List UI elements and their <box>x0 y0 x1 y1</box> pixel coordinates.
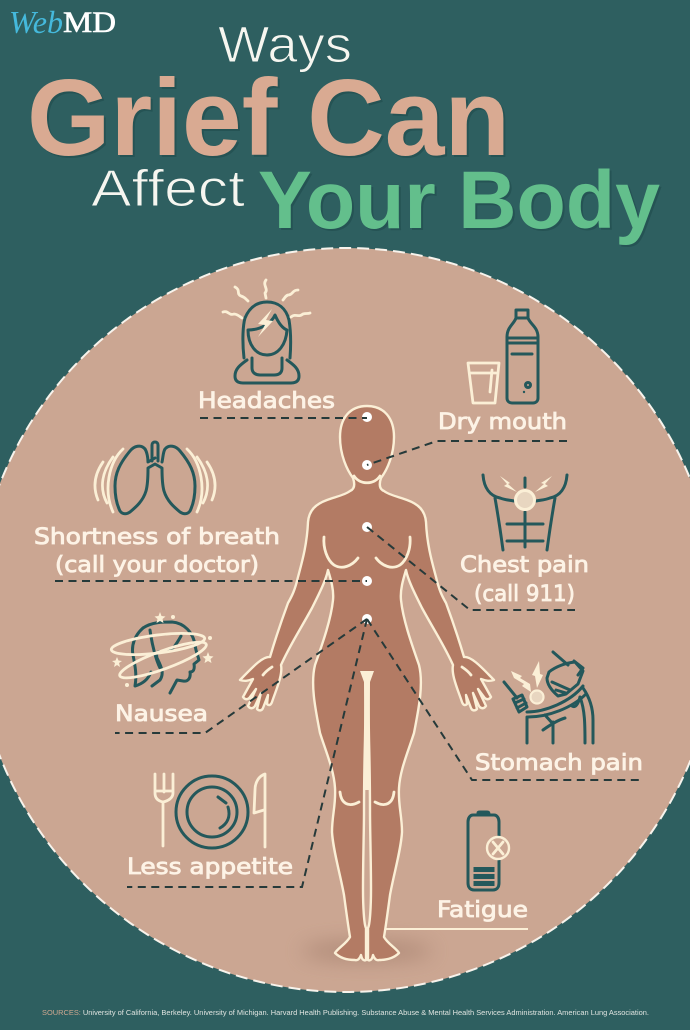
sources: SOURCES: University of California, Berkeley. University of Michigan. Harvard Health Publishing. Substance Abuse & Mental Health Services Administration. American Lung Association. <box>42 1008 649 1017</box>
icon: nausea <box>110 612 214 693</box>
logo: WebMD: Web <box>9 4 63 40</box>
icon: water bottle and glass <box>468 310 538 403</box>
label: Chest pain: (call 911) <box>474 581 575 607</box>
label: Fatigue: Fatigue <box>437 897 528 923</box>
label: Headaches: Headaches <box>198 388 335 414</box>
icon: plate and cutlery <box>155 774 265 848</box>
title: Grief Can <box>29 59 512 181</box>
title: Ways <box>218 16 352 73</box>
label: Chest pain <box>460 552 589 607</box>
logo: WebMD: MD <box>63 6 116 39</box>
label: Less appetite: Less appetite <box>127 854 293 880</box>
body marker dots <box>362 412 372 624</box>
label: Chest pain: Chest pain <box>460 552 589 578</box>
title: Affect <box>91 160 246 218</box>
title: Your Body <box>260 157 662 248</box>
icon: lungs <box>95 442 215 514</box>
title <box>27 16 662 248</box>
label: Shortness of breath: Shortness of breath <box>34 524 280 550</box>
label: Dry mouth: Dry mouth <box>438 409 567 435</box>
label: Nausea: Nausea <box>115 701 208 727</box>
icon: stomach pain <box>504 652 593 743</box>
title: Your Body <box>258 155 660 246</box>
panel: dashed circle <box>0 248 690 992</box>
title: Grief Can <box>27 57 510 179</box>
label: Stomach pain: Stomach pain <box>475 750 643 776</box>
icon: headache <box>223 280 310 383</box>
connector lines <box>55 418 643 929</box>
label: Shortness of breath <box>34 524 280 578</box>
icon: chest pain <box>483 475 567 550</box>
icon: battery <box>468 812 509 890</box>
body figure <box>240 406 494 961</box>
logo: WebMD <box>9 4 116 40</box>
label: Shortness of breath: (call your doctor) <box>55 552 259 578</box>
